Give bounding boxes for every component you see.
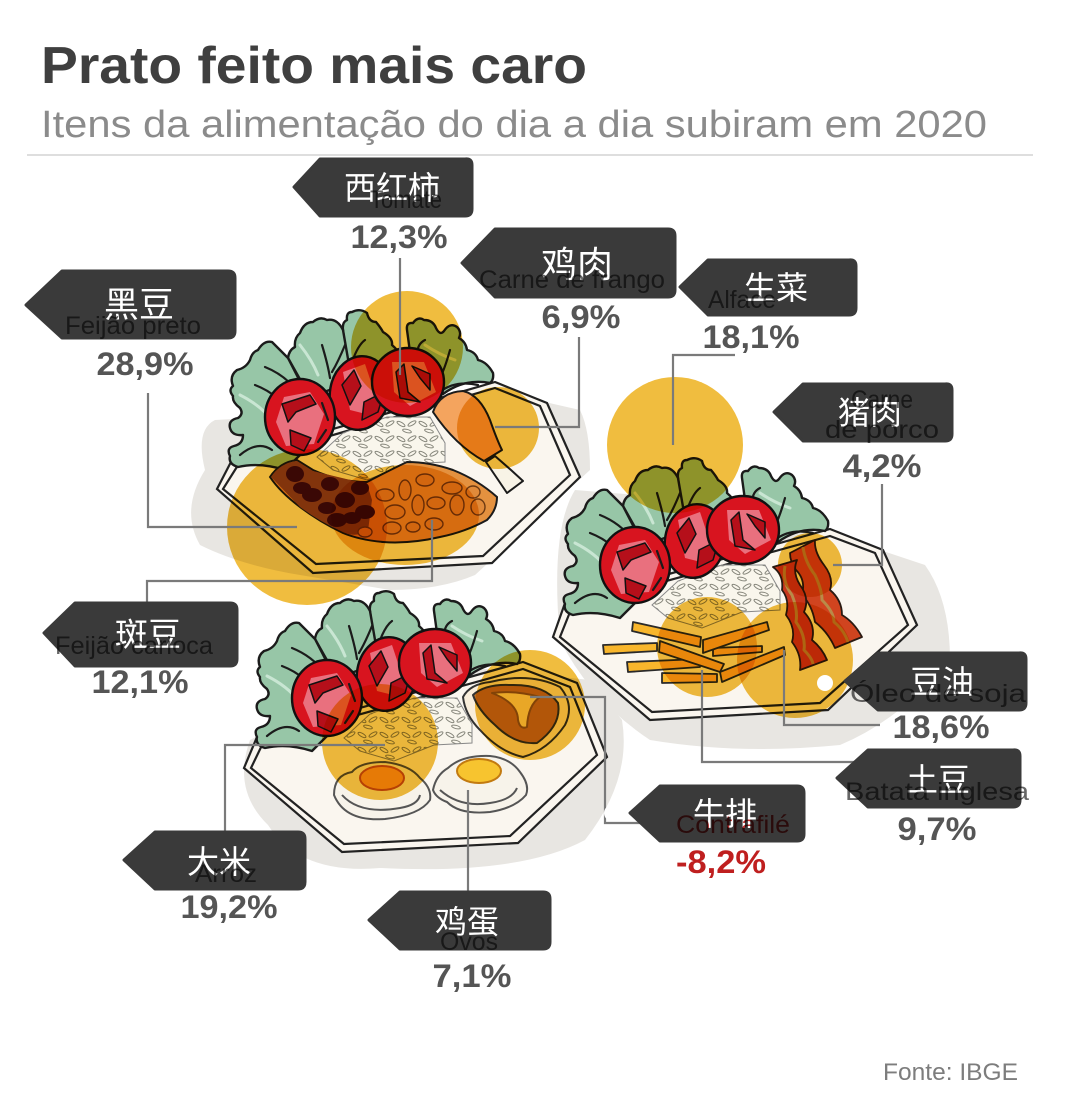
label: chicken <box>462 229 675 297</box>
label: eggs <box>369 892 550 949</box>
item: rice <box>180 860 278 925</box>
label: pinto beans: 斑豆 <box>115 616 181 653</box>
food: chicken leg <box>433 391 523 493</box>
label: tomato <box>294 159 472 216</box>
item: eggs: Ovos <box>440 928 498 956</box>
label: tomato: 西红柿 <box>344 170 440 206</box>
item: chicken: 6,9% <box>542 299 620 335</box>
source: Fonte: IBGE <box>883 1059 1018 1086</box>
item: pinto beans: 12,1% <box>92 664 188 700</box>
label: steak <box>630 786 804 841</box>
food: fries <box>603 622 785 683</box>
item: potato <box>845 778 1029 847</box>
item: pork: 4,2% <box>842 448 922 484</box>
item: soybean oil: 18,6% <box>892 709 990 745</box>
item: pinto beans <box>55 632 213 700</box>
food: bacon <box>773 540 862 670</box>
label: pinto beans <box>44 603 237 666</box>
food: eggs <box>334 756 527 819</box>
food: beans <box>270 460 497 542</box>
item: steak: -8,2% <box>676 844 766 880</box>
item: black beans: 28,9% <box>96 346 194 382</box>
plate 1 <box>217 310 580 573</box>
item: eggs: 7,1% <box>432 958 512 994</box>
item: black beans: Feijão preto <box>65 312 201 340</box>
food: lettuce, tomato and rice <box>256 591 520 761</box>
label: rice <box>124 832 305 889</box>
label: potato <box>837 750 1020 807</box>
label: black beans <box>26 271 235 338</box>
item: tomato <box>350 186 448 255</box>
item: steak <box>676 811 790 880</box>
label: eggs: 鸡蛋 <box>435 904 499 940</box>
label: lettuce: 生菜 <box>744 270 808 306</box>
item: tomato: Tomate <box>370 186 442 214</box>
plate 2 <box>553 458 917 720</box>
item: rice: Arroz <box>195 860 257 888</box>
item: pork <box>825 386 939 484</box>
item: steak: Contrafilé <box>676 811 790 839</box>
white dots <box>604 281 833 821</box>
item: pork: de porco <box>825 416 939 444</box>
item: eggs <box>432 928 512 994</box>
item: potato: Batata inglesa <box>845 778 1029 806</box>
label: lettuce <box>680 260 856 315</box>
label boxes with Chinese names <box>26 159 1026 949</box>
title: Prato feito mais caro <box>41 37 587 95</box>
item: lettuce: 18,1% <box>702 319 800 355</box>
subtitle: Itens da alimentação do dia a dia subiram em 2020 <box>41 104 987 146</box>
label: pork <box>774 384 952 441</box>
label: pork: 猪肉 <box>838 395 902 431</box>
plate 3 <box>244 591 607 852</box>
food: lettuce, tomato and rice <box>229 310 493 480</box>
label: black beans: 黑豆 <box>104 286 174 325</box>
item: black beans <box>65 312 201 382</box>
label: rice: 大米 <box>187 844 251 880</box>
label: potato: 土豆 <box>906 762 970 798</box>
item: chicken: Carne de frango <box>479 266 665 294</box>
item: soybean oil: Óleo de soja <box>850 679 1026 708</box>
item: soybean oil <box>850 679 1026 745</box>
item: lettuce: Alface <box>708 286 776 314</box>
food: lettuce, tomato and rice <box>564 458 828 628</box>
item: rice: 19,2% <box>180 889 278 925</box>
food: steak <box>463 678 569 757</box>
label: soybean oil <box>845 653 1026 710</box>
label: soybean oil: 豆油 <box>910 664 974 700</box>
item: lettuce <box>702 286 800 355</box>
item: chicken <box>479 266 665 335</box>
plate shadows <box>191 402 950 869</box>
leader lines <box>147 258 905 900</box>
item: tomato: 12,3% <box>350 219 448 255</box>
item: pork: Carne <box>851 386 913 414</box>
label: chicken: 鸡肉 <box>541 244 613 285</box>
yellow highlight circles <box>227 291 853 800</box>
label: steak: 牛排 <box>693 796 757 832</box>
item: potato: 9,7% <box>898 811 976 847</box>
item: pinto beans: Feijão carioca <box>55 632 213 660</box>
